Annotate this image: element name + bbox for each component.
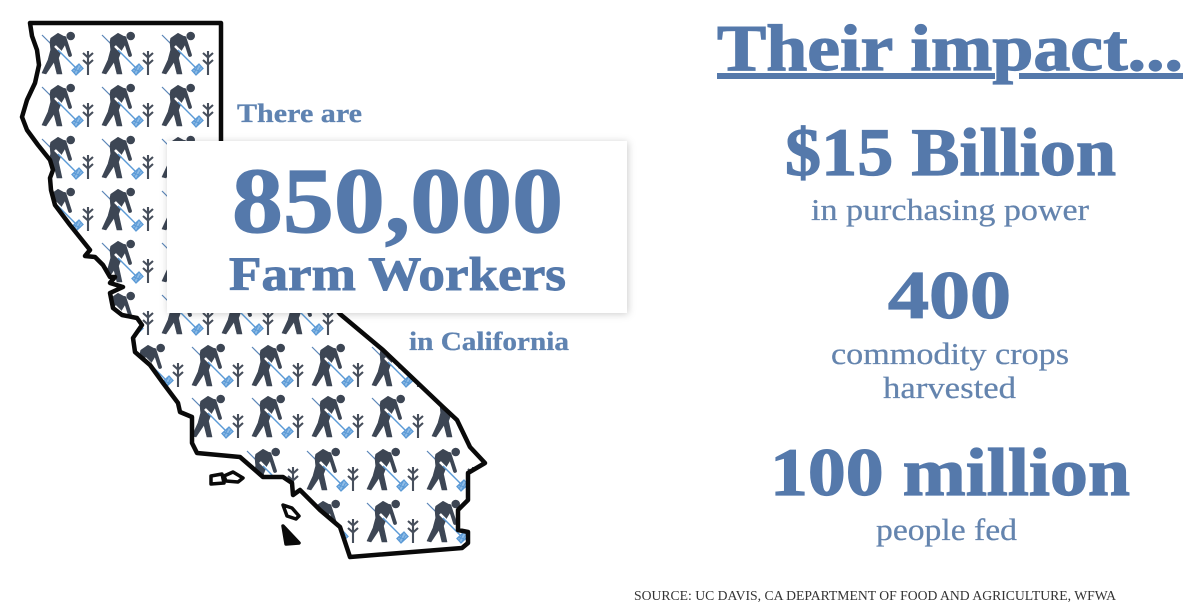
icon grid: farm workers and plants [42,32,483,543]
stat: 100 million [770,434,1130,547]
islands [211,472,299,544]
source line: SOURCE: UC DAVIS, CA DEPARTMENT OF FOOD AND AGRICULTURE, WFWA [634,589,1117,604]
stat: 400 commodity crops: 400 [888,257,1011,333]
stat: 100 million: 100 million [770,434,1130,510]
stat: 400 commodity crops: commodity crops [831,336,1069,371]
stat: $15 Billion: in purchasing power [811,192,1090,227]
stat: 400 commodity crops: harvested [883,370,1017,405]
stat: 100 million: people fed [876,512,1018,547]
text: in California: in California [409,327,569,356]
label: Farm Workers: Farm Workers [229,248,566,301]
stat: 400 commodity crops [831,257,1069,405]
heading: Their impact...: Their impact... [717,12,1183,85]
number: 850,000: 850,000 [232,150,563,253]
map: California filled with farm worker icons [22,23,485,557]
text: There are: There are [237,99,362,128]
stat: $15 Billion: $15 Billion [785,114,1116,190]
callout box: 850,000 Farm Workers [167,141,627,313]
state outline [22,23,485,557]
stat: $15 Billion [785,114,1116,227]
